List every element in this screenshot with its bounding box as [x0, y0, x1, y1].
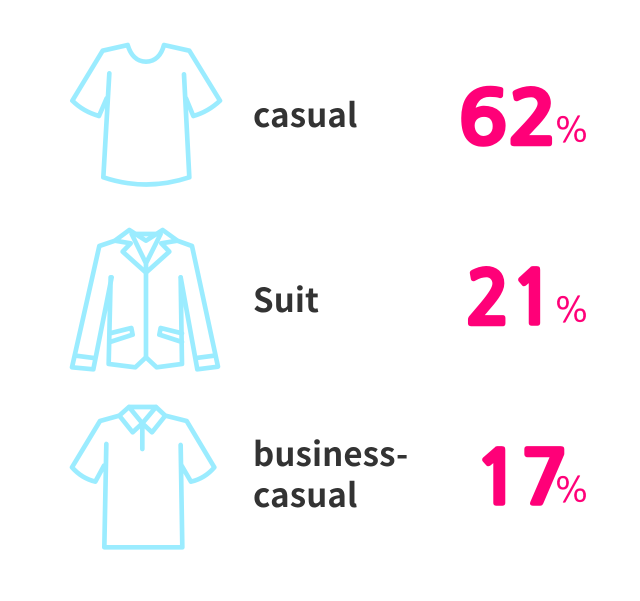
value: 21%: % — [553, 293, 590, 327]
value: 21%: 21 — [466, 263, 555, 336]
label: Suit: Suit — [253, 274, 319, 322]
label: business-casual: business- — [253, 428, 408, 476]
value: 62%: % — [553, 113, 590, 147]
value: 17%: 17 — [474, 443, 568, 516]
label: business-casual — [253, 428, 408, 517]
label: casual: casual — [253, 89, 357, 137]
label: business-casual: casual — [253, 469, 357, 517]
icon: polo shirt — [72, 407, 214, 547]
value: 62%: 62 — [458, 82, 558, 155]
icon: t-shirt — [72, 45, 220, 184]
value: 17%: % — [553, 473, 590, 507]
icon: suit jacket — [72, 230, 218, 369]
